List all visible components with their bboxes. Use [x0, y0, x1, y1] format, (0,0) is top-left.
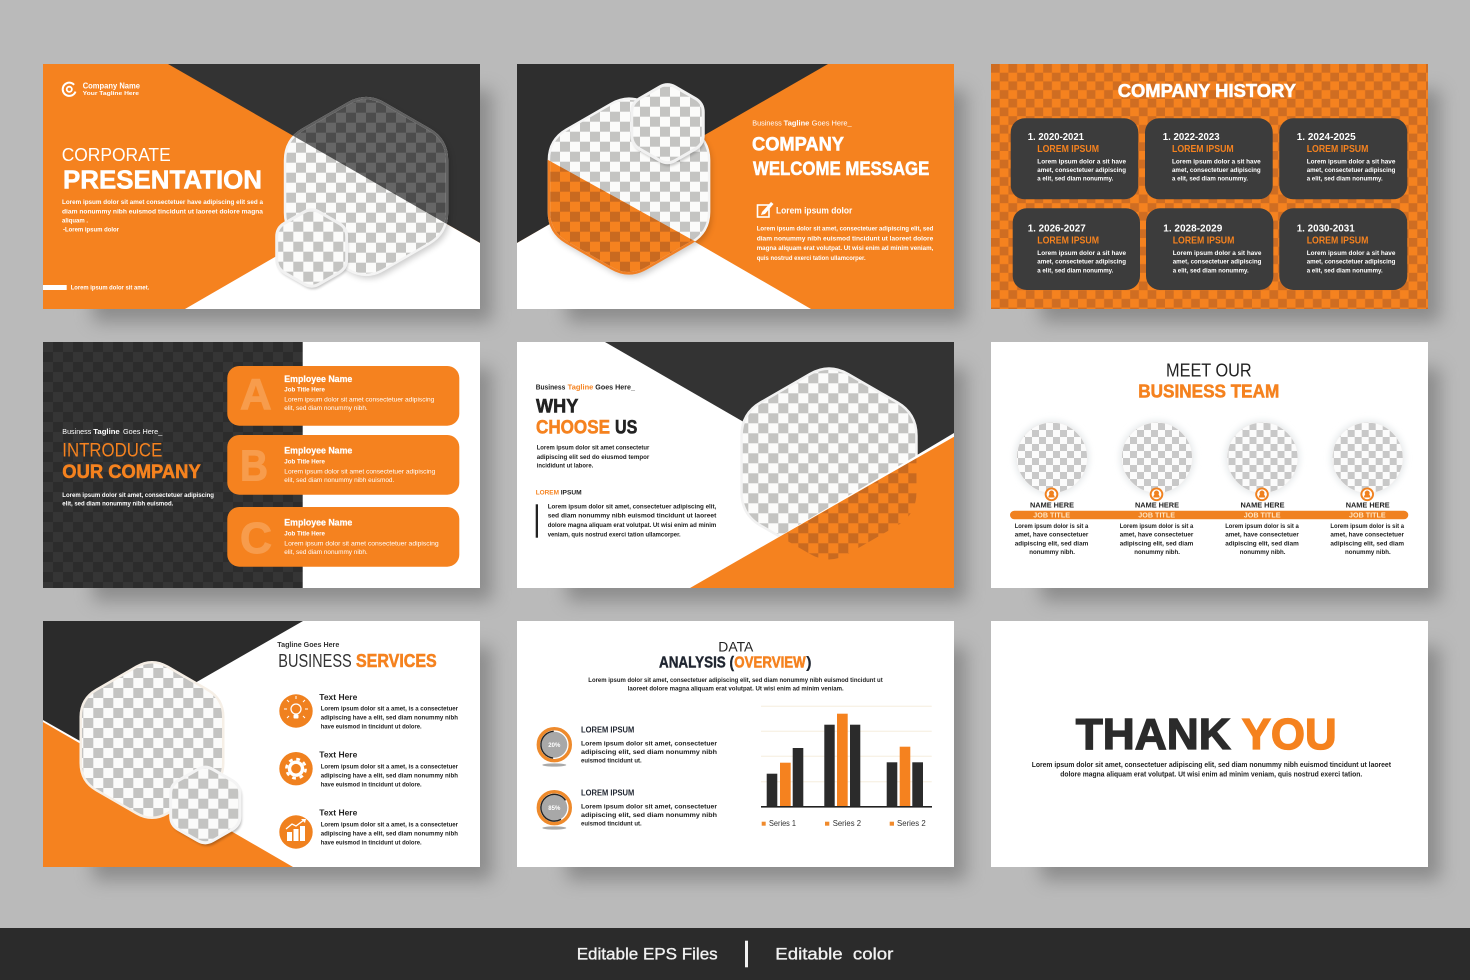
timeline card 2030-2031: a elit, sed diam nonummy. [1307, 267, 1383, 274]
team member 1: JOB TITLE [1033, 513, 1070, 520]
heading [278, 651, 437, 671]
tagline: Business [752, 121, 782, 128]
heading [659, 638, 812, 672]
intro text [588, 677, 883, 693]
timeline card 2024-2025: amet, consectetuer adipiscing [1307, 167, 1395, 174]
heading: YOU [1242, 710, 1337, 759]
quote text with bar [536, 503, 717, 538]
large hexagon image placeholder [284, 96, 452, 281]
team member 1: adipiscing elit, sed diam [1015, 540, 1089, 547]
timeline card 2022-2023: 1. 2022-2023 [1163, 132, 1220, 143]
heading: INTRODUCE [62, 439, 162, 461]
text block: diam nonummy nibh euismod tincidunt ut laoreet dolore magna [62, 208, 263, 215]
employee card C [227, 507, 459, 567]
tagline: Tagline Goes Here [277, 642, 339, 649]
quote text with bar: veniam, quis nostrud exerci tation ullamcorper. [548, 531, 681, 538]
text block: magna aliquam erat volutpat. Ut wisi enim ad minim veniam, [757, 245, 933, 252]
panel: business services slide [43, 621, 480, 867]
heading: OUR COMPANY [62, 461, 201, 483]
tagline: Tagline [93, 429, 120, 436]
text block: incididunt ut labore. [537, 462, 593, 469]
orange corner [690, 436, 954, 588]
timeline card 2026-2027: a elit, sed diam nonummy. [1037, 267, 1113, 274]
team member 2: NAME HERE [1135, 502, 1179, 509]
team member 2: nonummy nibh. [1134, 549, 1180, 556]
text block: Lorem ipsum dolor sit amet consectetur [537, 445, 650, 452]
text block: elit, sed diam nonummy nibh euismod. [62, 500, 173, 507]
tagline: Goes Here_ [595, 384, 635, 391]
donut 85%: 85% [548, 806, 561, 812]
team member 4: adipiscing elit, sed diam [1330, 540, 1404, 547]
timeline card 2028-2029: a elit, sed diam nonummy. [1173, 267, 1249, 274]
timeline card 2030-2031: LOREM IPSUM [1307, 236, 1368, 247]
heading: COMPANY HISTORY [1118, 80, 1297, 101]
heading [1138, 359, 1279, 401]
employee card A: elit, sed diam nonummy nibh. [284, 405, 368, 412]
service text 1: adipiscing have a elit, sed diam nonummy nibh [321, 715, 458, 722]
large hexagon image placeholder [79, 661, 224, 819]
team member 1: amet, have consectetuer [1015, 532, 1089, 539]
analysis text 2 [581, 788, 717, 828]
team member 2 [1120, 421, 1194, 556]
panel: thank you slide [991, 621, 1428, 867]
service text 3: adipiscing have a elit, sed diam nonummy nibh [321, 830, 458, 837]
text block: -Lorem ipsum dolor [63, 227, 119, 234]
team member 2: Lorem ipsum dolor is sit a [1120, 523, 1194, 530]
heading: SERVICES [356, 651, 437, 671]
team member 3: adipiscing elit, sed diam [1225, 540, 1299, 547]
text block [757, 226, 934, 262]
timeline card 2026-2027: LOREM IPSUM [1037, 236, 1099, 247]
heading [752, 135, 929, 180]
timeline card 2026-2027 [1013, 208, 1140, 290]
company name: Your Tagline Here [83, 91, 139, 97]
service text 1: Text Here [319, 692, 358, 702]
subheading: LOREM [536, 489, 559, 496]
timeline card 2028-2029 [1146, 208, 1273, 290]
service text 1 [319, 692, 458, 731]
intro text: Lorem ipsum dolor sit amet, consectetuer adipiscing elit, sed diam nonummy nibh euismod tincidunt ut [588, 677, 883, 684]
employee card A: Lorem ipsum dolor sit amet consectetuer adipiscing [284, 397, 435, 404]
employee card B: Job Title Here [284, 458, 325, 465]
service text 3: have euismod in tincidunt ut dolore. [321, 839, 422, 846]
tagline: Goes Here_ [123, 429, 162, 436]
timeline card 2020-2021: 1. 2020-2021 [1028, 132, 1084, 143]
analysis text 1: LOREM IPSUM [581, 726, 635, 735]
footer divider [745, 941, 748, 967]
analysis text 2: Lorem ipsum dolor sit amet, consectetuer [581, 803, 717, 810]
tagline [536, 384, 635, 391]
footer label: editable color: Editable color [775, 944, 894, 963]
service text 2: Text Here [319, 750, 358, 760]
tagline: Tagline [568, 384, 593, 391]
heading: ) [806, 655, 812, 672]
quote text with bar: dolore magna aliquam erat volutpat. Ut wisi enim ad minim [548, 522, 716, 529]
chart legend: Series 2 [833, 819, 862, 828]
text block: quis nostrud exerci tation ullamcorper. [757, 255, 866, 262]
subheading: IPSUM [561, 489, 582, 496]
panel: data analysis slide [517, 621, 954, 867]
text block: Lorem ipsum dolor sit amet, consectetuer adipiscing elit, sed [757, 226, 933, 233]
team member 4: nonummy nibh. [1345, 549, 1391, 556]
chart legend: Series 1 [769, 819, 796, 828]
analysis text 2: LOREM IPSUM [581, 788, 635, 797]
employee card A [227, 366, 459, 426]
subheading: Lorem ipsum dolor [776, 206, 853, 216]
employee card A: A [240, 370, 272, 419]
small hexagon image placeholder [275, 208, 349, 290]
company name [83, 81, 141, 97]
footer label: editable EPS files: Editable EPS Files [577, 944, 718, 963]
chart legend [762, 819, 926, 828]
service text 3: Lorem ipsum dolor sit a amet, is a consectetuer [321, 821, 458, 828]
employee card C: C [240, 514, 272, 563]
bar chart [761, 706, 932, 808]
timeline card 2022-2023 [1145, 118, 1273, 199]
timeline card 2028-2029: 1. 2028-2029 [1163, 224, 1223, 235]
timeline card 2030-2031: Lorem ipsum dolor a sit have [1307, 250, 1396, 257]
icon: edit note [758, 202, 774, 217]
heading: US [615, 417, 637, 438]
panel: business team slide [991, 342, 1428, 588]
small hexagon image placeholder [630, 83, 706, 167]
timeline card 2028-2029: amet, consectetuer adipiscing [1173, 259, 1261, 266]
service text 2: adipiscing have a elit, sed diam nonummy nibh [321, 773, 458, 780]
text block [62, 199, 263, 234]
quote text with bar: sed diam nonummy nibh euismod tincidunt ut laoreet [548, 513, 717, 520]
hexagon image placeholder [740, 367, 918, 537]
timeline card 2020-2021 [1011, 118, 1138, 199]
timeline card 2020-2021: Lorem ipsum dolor a sit have [1037, 158, 1126, 165]
heading [1076, 710, 1337, 759]
intro text: laoreet dolore magna aliquam erat volutpat. Ut wisi enim ad minim veniam. [628, 686, 844, 693]
tagline: Tagline [784, 121, 809, 128]
employee card C: Lorem ipsum dolor sit amet consectetuer adipiscing [284, 540, 439, 547]
donut 85% [536, 789, 573, 830]
tagline [62, 429, 162, 436]
team member 2: amet, have consectetuer [1120, 532, 1194, 539]
text block: dolore magna aliquam erat volutpat. Ut wisi enim ad minim veniam, quis nostrud exerci tation. [1060, 772, 1362, 779]
chart legend: Series 2 [897, 819, 926, 828]
team member 3: amet, have consectetuer [1225, 532, 1299, 539]
team member 4 [1330, 421, 1405, 556]
service text 2 [319, 750, 458, 789]
timeline card 2030-2031: amet, consectetuer adipiscing [1307, 259, 1395, 266]
analysis text 2: adipiscing elit, sed diam nonummy nibh [581, 812, 717, 819]
team member 3: Lorem ipsum dolor is sit a [1225, 523, 1299, 530]
team member 1: Lorem ipsum dolor is sit a [1015, 523, 1089, 530]
heading: OVERVIEW [734, 655, 806, 672]
heading: WELCOME MESSAGE [753, 159, 929, 180]
timeline card 2030-2031 [1279, 208, 1407, 290]
subheading [536, 489, 582, 496]
text block: Lorem ipsum dolor sit amet consectetuer have adipiscing elit sed a [62, 199, 263, 206]
timeline card 2020-2021: a elit, sed diam nonummy. [1037, 176, 1113, 183]
footer band [0, 928, 1470, 980]
service text 2: Lorem ipsum dolor sit a amet, is a consectetuer [321, 764, 458, 771]
employee card A: Employee Name [284, 374, 352, 384]
footer bar and note: Lorem ipsum dolor sit amet. [71, 284, 149, 292]
timeline card 2028-2029: Lorem ipsum dolor a sit have [1173, 250, 1262, 257]
analysis text 1 [581, 726, 717, 765]
heading: THANK [1076, 710, 1231, 759]
timeline card 2022-2023: a elit, sed diam nonummy. [1172, 176, 1248, 183]
service text 3: Text Here [319, 807, 358, 817]
timeline card 2022-2023: Lorem ipsum dolor a sit have [1172, 158, 1261, 165]
employee card B [227, 435, 459, 495]
team member 4: amet, have consectetuer [1330, 532, 1404, 539]
analysis text 1: adipiscing elit, sed diam nonummy nibh [581, 749, 717, 756]
icon: company logo [61, 81, 78, 98]
timeline card 2024-2025: a elit, sed diam nonummy. [1307, 176, 1383, 183]
team member 3: nonummy nibh. [1240, 549, 1286, 556]
heading: COMPANY [752, 135, 844, 156]
employee card B: elit, sed diam nonummy nibh euismod. [284, 477, 394, 484]
timeline card 2022-2023: LOREM IPSUM [1172, 144, 1234, 155]
team member 2: adipiscing elit, sed diam [1120, 540, 1194, 547]
timeline card 2030-2031: 1. 2030-2031 [1297, 224, 1355, 235]
timeline card 2024-2025: 1. 2024-2025 [1297, 132, 1356, 143]
text block [537, 445, 650, 469]
team member 1: nonummy nibh. [1029, 549, 1075, 556]
panel: why choose us slide [517, 342, 954, 589]
footer bar and note [43, 284, 149, 292]
heading: PRESENTATION [63, 164, 262, 194]
timeline card 2020-2021: LOREM IPSUM [1037, 144, 1099, 155]
panel: introduce our company slide [43, 342, 480, 588]
panel: company welcome message slide [517, 64, 954, 309]
heading [62, 439, 201, 483]
timeline card 2022-2023: amet, consectetuer adipiscing [1172, 167, 1261, 174]
service text 1: Lorem ipsum dolor sit a amet, is a consectetuer [321, 706, 458, 713]
employee card C: Job Title Here [284, 530, 325, 537]
timeline card 2024-2025: LOREM IPSUM [1307, 144, 1368, 155]
analysis text 2: euismod tincidunt ut. [581, 821, 642, 828]
icon: growth chart [279, 815, 313, 849]
tagline: Business [536, 384, 565, 391]
heading: WHY [536, 396, 579, 417]
analysis text 1: Lorem ipsum dolor sit amet, consectetuer [581, 740, 717, 747]
team member 2: JOB TITLE [1138, 513, 1175, 520]
employee card C: Employee Name [284, 518, 352, 528]
team member 1: NAME HERE [1030, 502, 1074, 509]
team member 1 [1015, 421, 1089, 556]
employee card B: Employee Name [284, 446, 352, 456]
team member 3 [1225, 421, 1300, 556]
heading: MEET OUR [1166, 359, 1252, 380]
panel: company history slide [991, 64, 1428, 309]
tagline [752, 121, 852, 128]
team member 4: JOB TITLE [1349, 513, 1386, 520]
employee card B: B [240, 442, 268, 491]
team member 3: JOB TITLE [1244, 513, 1281, 520]
panel: corporate presentation slide [43, 64, 480, 309]
analysis text 1: euismod tincidunt ut. [581, 758, 642, 765]
text block: diam nonummy nibh euismod tincidunt ut laoreet dolore [757, 235, 934, 242]
team member 4: NAME HERE [1346, 502, 1390, 509]
timeline card 2026-2027: amet, consectetuer adipiscing [1037, 259, 1126, 266]
tagline: Business [62, 429, 92, 436]
heading: BUSINESS [278, 651, 352, 671]
small hexagon image placeholder [169, 766, 243, 847]
icon: gear [279, 752, 313, 785]
heading: ANALYSIS ( [659, 655, 735, 672]
timeline card 2024-2025: Lorem ipsum dolor a sit have [1307, 158, 1396, 165]
timeline card 2028-2029: LOREM IPSUM [1173, 236, 1234, 247]
timeline card 2024-2025 [1279, 118, 1407, 199]
text block: Lorem ipsum dolor sit amet, consectetuer adipiscing [62, 492, 214, 499]
heading: BUSINESS TEAM [1138, 380, 1279, 401]
timeline card 2026-2027: 1. 2026-2027 [1028, 224, 1086, 235]
service text 2: have euismod in tincidunt ut dolore. [321, 782, 422, 789]
large hexagon image placeholder [548, 97, 714, 280]
tagline: Goes Here_ [812, 121, 852, 128]
text block: aliquam . [62, 218, 88, 225]
employee card B: Lorem ipsum dolor sit amet consectetuer adipiscing [284, 468, 436, 475]
employee card C: elit, sed diam nonummy nibh. [284, 549, 368, 556]
team member 3: NAME HERE [1240, 502, 1285, 509]
timeline card 2026-2027: Lorem ipsum dolor a sit have [1037, 250, 1126, 257]
donut 20% [538, 729, 570, 767]
employee card A: Job Title Here [284, 386, 325, 393]
text block [1032, 762, 1392, 779]
text block [62, 492, 214, 507]
heading: CORPORATE [62, 145, 171, 165]
heading [62, 145, 262, 194]
timeline card 2020-2021: amet, consectetuer adipiscing [1037, 167, 1126, 174]
text block: adipiscing elit sed do eiusmod tempor [537, 454, 650, 461]
heading: CHOOSE [536, 417, 610, 438]
text block: Lorem ipsum dolor sit amet, consectetuer adipiscing elit, sed diam nonummy nibh euismod tincidunt ut laoreet [1032, 762, 1392, 769]
icon: light bulb [279, 694, 313, 728]
team member 4: Lorem ipsum dolor is sit a [1330, 523, 1404, 530]
quote text with bar: Lorem ipsum dolor sit amet, consectetuer adipiscing elit, [548, 503, 716, 510]
service text 1: have euismod in tincidunt ut dolore. [321, 724, 422, 731]
heading: DATA [718, 638, 754, 654]
job title bar [1010, 511, 1408, 519]
heading [536, 396, 637, 438]
service text 3 [319, 807, 458, 846]
donut 20%: 20% [548, 743, 561, 749]
company name: Company Name [83, 81, 141, 90]
